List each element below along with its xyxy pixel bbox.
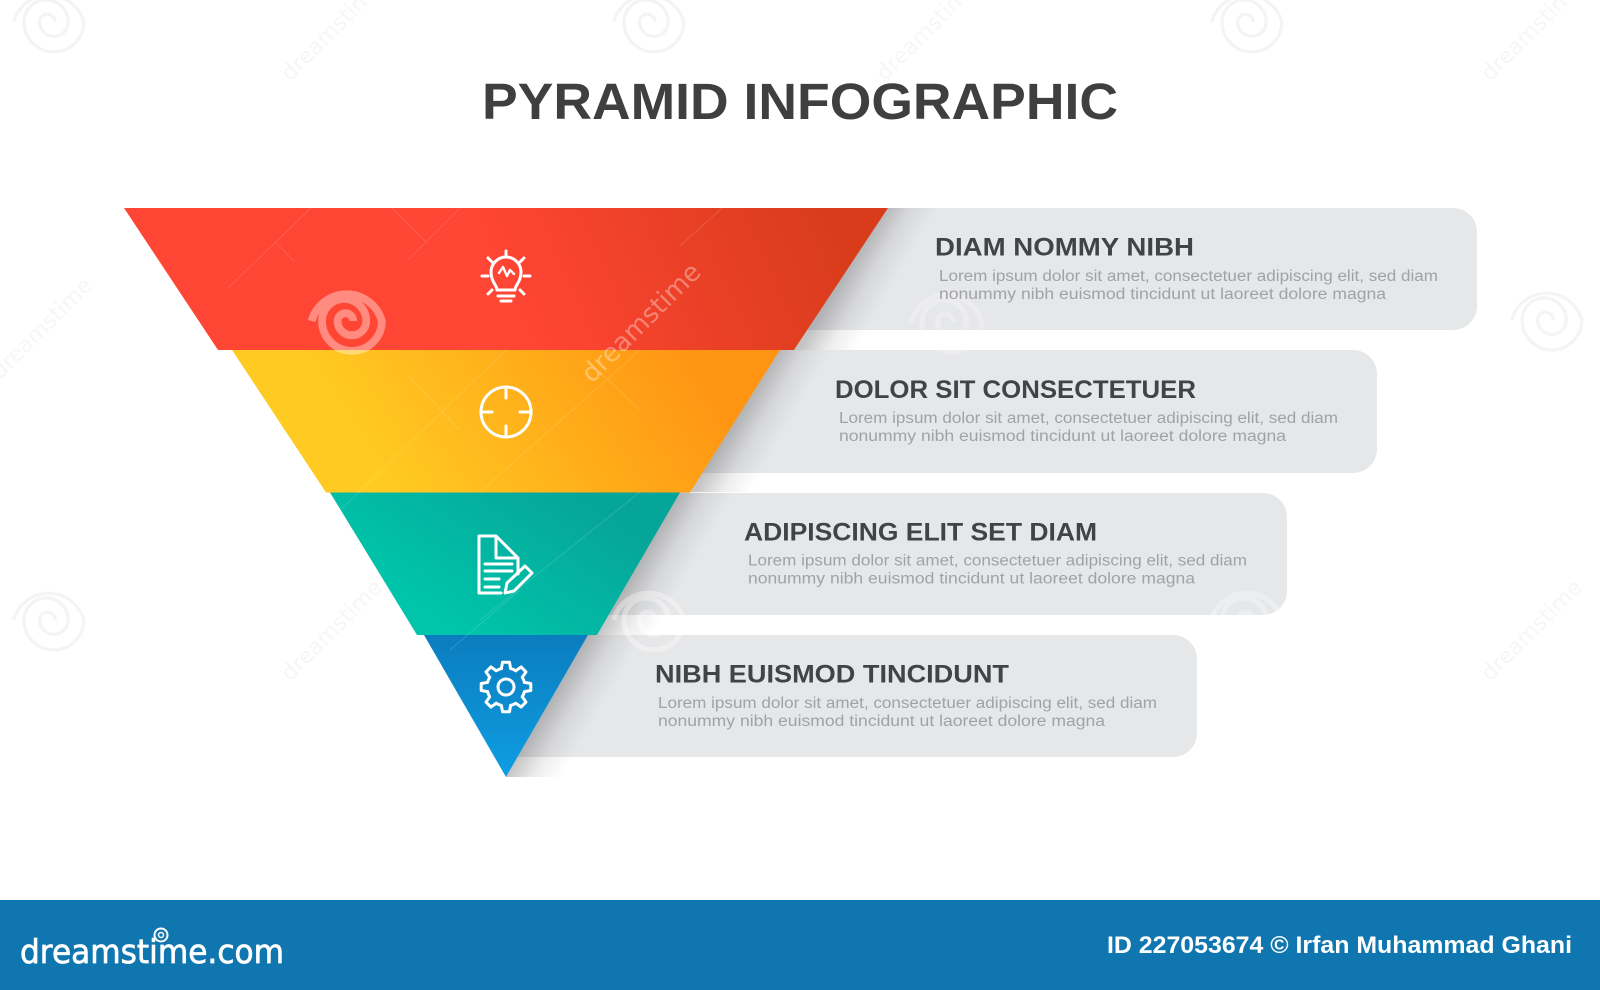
text block: dolor sit consectetuer: DOLOR SIT CONSECTETUER (835, 376, 1196, 404)
watermark lines over pyramid (228, 208, 722, 650)
panel: dolor sit consectetuer background (650, 350, 1377, 473)
text block: adipiscing elit set diam: nonummy nibh euismod tincidunt ut laoreet dolore magna (748, 570, 1195, 588)
pyramid band: teal (330, 492, 680, 635)
text block: nibh euismod tincidunt (655, 660, 1157, 730)
text block: dolor sit consectetuer (835, 376, 1338, 445)
cast shadows from pyramid (506, 208, 968, 777)
panel: nibh euismod tincidunt background (512, 635, 1197, 757)
icon: target (481, 387, 531, 437)
watermark spirals on background (14, 0, 1582, 650)
watermark text on background: dreamstime (1477, 575, 1588, 686)
text block: adipiscing elit set diam (744, 518, 1247, 588)
text block: adipiscing elit set diam: ADIPISCING ELIT SET DIAM (744, 518, 1097, 546)
watermark text on background: dreamstime (277, 575, 388, 686)
watermark text on background (0, 0, 1588, 686)
footer credit: ID 227053674 © Irfan Muhammad Ghani (1107, 932, 1572, 959)
watermark spirals over content (312, 294, 1282, 650)
pyramid band: blue (424, 635, 588, 777)
pyramid band: red (124, 208, 888, 350)
footer logo: dreamstime.com (20, 932, 284, 971)
title: PYRAMID INFOGRAPHIC (482, 73, 1118, 130)
text block: dolor sit consectetuer: nonummy nibh euismod tincidunt ut laoreet dolore magna (839, 428, 1286, 445)
panel: diam nommy nibh background (700, 208, 1477, 330)
text block: adipiscing elit set diam: Lorem ipsum dolor sit amet, consectetuer adipiscing elit, sed diam (748, 552, 1247, 570)
icon: gear (481, 662, 531, 712)
text block: diam nommy nibh: Lorem ipsum dolor sit amet, consectetuer adipiscing elit, sed diam (939, 268, 1438, 285)
text block: nibh euismod tincidunt: Lorem ipsum dolor sit amet, consectetuer adipiscing elit, sed diam (658, 695, 1157, 712)
icon: document with pencil (479, 536, 532, 593)
footer bar (0, 900, 1600, 990)
text block: nibh euismod tincidunt: nonummy nibh euismod tincidunt ut laoreet dolore magna (658, 713, 1105, 730)
text block: dolor sit consectetuer: Lorem ipsum dolor sit amet, consectetuer adipiscing elit, sed diam (839, 410, 1338, 427)
icon: light bulb (482, 251, 530, 301)
watermark text over pyramid: dreamstime (576, 257, 707, 389)
panel: adipiscing elit set diam background (560, 493, 1287, 615)
text block: nibh euismod tincidunt: NIBH EUISMOD TINCIDUNT (655, 660, 1009, 688)
text block: diam nommy nibh (935, 234, 1438, 303)
text block: diam nommy nibh: DIAM NOMMY NIBH (935, 234, 1194, 262)
text block: diam nommy nibh: nonummy nibh euismod tincidunt ut laoreet dolore magna (939, 286, 1386, 303)
pyramid band: yellow (232, 350, 780, 492)
